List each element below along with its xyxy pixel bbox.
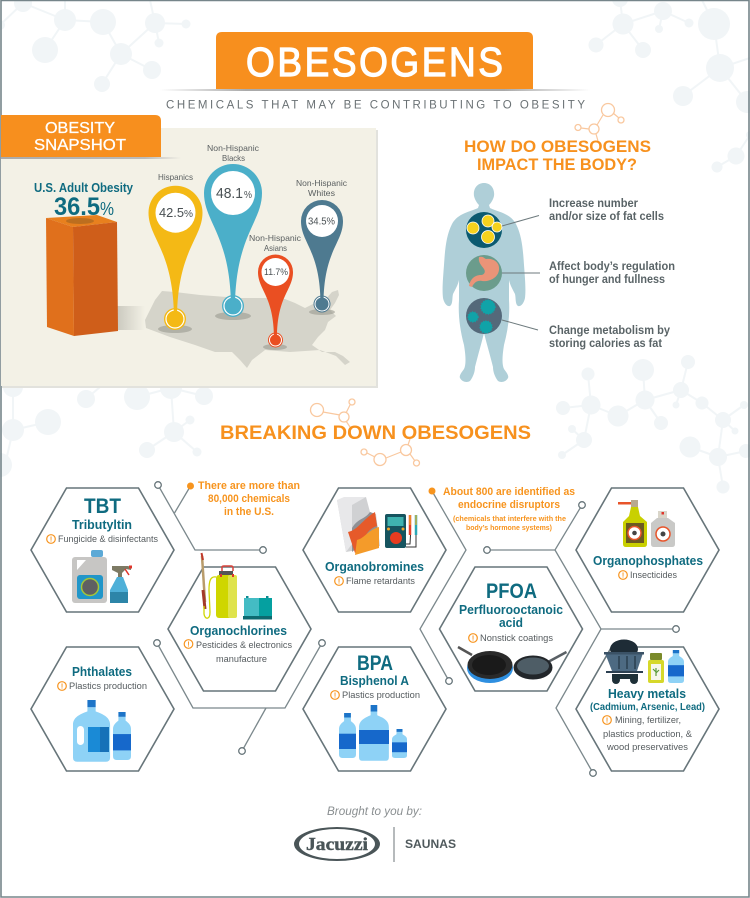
warning icon <box>619 571 627 580</box>
panel: Heavy metals: plastics production, & <box>603 729 693 740</box>
panel: BPA: BPA <box>357 652 393 675</box>
pin: Non-Hispanic Asians: Asians <box>264 243 287 253</box>
logo: Jacuzzi Saunas: Jacuzzi <box>306 834 368 854</box>
US adult obesity value <box>34 181 133 221</box>
background molecules: top left <box>0 0 190 92</box>
logo: Jacuzzi Saunas: SAUNAS <box>405 839 456 851</box>
callout: hunger: Affect body’s regulation <box>549 261 675 273</box>
background molecules: below snapshot <box>0 377 213 477</box>
warning icon: ! <box>334 692 336 700</box>
callout: fat cells: Increase number <box>549 198 638 210</box>
warning icon: ! <box>338 578 340 586</box>
tab: obesity snapshot heading: SNAPSHOT <box>34 137 126 154</box>
pin: Non-Hispanic Asians: 11.7% <box>264 267 289 278</box>
panel: Organobromines <box>303 488 446 612</box>
callout: 80,000 chemicals: There are more than <box>198 480 300 492</box>
pin: Non-Hispanic Whites <box>296 178 348 315</box>
callout: endocrine disruptors: endocrine disruptors <box>458 499 560 511</box>
panel: PFOA: Perfluorooctanoic <box>459 602 563 617</box>
panel: TBT: Tributyltin <box>72 517 132 532</box>
warning icon: ! <box>61 684 63 690</box>
fat cells circle <box>466 212 502 248</box>
warning icon: ! <box>622 572 624 580</box>
callout: metabolism: Change metabolism by <box>549 325 671 337</box>
icon: insecticide bottles <box>618 500 675 547</box>
pin: Non-Hispanic Whites: Non-Hispanic <box>296 178 348 188</box>
callout: metabolism: storing calories as fat <box>549 338 662 350</box>
callout: endocrine disruptors: body’s hormone systems) <box>466 523 552 532</box>
callout: 80,000 chemicals: in the U.S. <box>224 506 274 518</box>
pin: Non-Hispanic Asians: Non-Hispanic <box>249 233 302 243</box>
panel: PFOA <box>440 567 582 691</box>
callout: endocrine disruptors <box>428 486 575 532</box>
panel: TBT <box>31 488 174 612</box>
title: OBESOGENS <box>246 40 503 85</box>
warning icon: ! <box>187 642 190 648</box>
panel: Phthalates: Phthalates <box>72 664 132 679</box>
callout: fat cells <box>502 198 664 226</box>
pin: Non-Hispanic Asians <box>249 233 302 350</box>
US adult obesity value: U.S. Adult Obesity <box>34 181 133 195</box>
US adult obesity value: % <box>100 199 114 219</box>
background molecules: lower right <box>556 355 750 494</box>
pin: Non-Hispanic Blacks: % <box>244 190 252 201</box>
pin: Non-Hispanic Blacks <box>204 143 262 320</box>
panel: Heavy metals: wood preservatives <box>606 742 688 753</box>
icon: coal cart, jar and bottle <box>604 640 684 684</box>
icon: orange molecule below breaking heading <box>361 439 420 466</box>
warning icon <box>47 535 55 544</box>
icon: orange molecule near impact heading <box>575 104 624 141</box>
panel: Organochlorines: manufacture <box>216 654 267 665</box>
panel: Organochlorines: Organochlorines <box>190 623 287 638</box>
panel: obesity snapshot <box>1 115 378 388</box>
panel: Heavy metals: Mining, fertilizer, <box>615 715 681 726</box>
panel: TBT: Fungicide & disinfectants <box>58 534 158 545</box>
panel: Heavy metals: (Cadmium, Arsenic, Lead) <box>590 702 705 713</box>
background molecules: top right <box>588 0 750 172</box>
icon: plastic bottles <box>339 705 407 761</box>
warning icon <box>58 682 66 690</box>
panel: Organophosphates: Insecticides <box>630 570 677 581</box>
3D bar <box>46 215 145 336</box>
tab: obesity snapshot heading: OBESITY <box>45 120 115 137</box>
pin: Non-Hispanic Blacks: Non-Hispanic <box>207 143 260 153</box>
callout: hunger <box>502 261 675 286</box>
icon: frying pans <box>458 647 566 683</box>
stomach circle <box>466 255 502 291</box>
logo: Jacuzzi Saunas <box>294 827 456 862</box>
panel: Organochlorines: Pesticides & electronics <box>196 640 292 651</box>
warning icon <box>184 640 193 648</box>
warning icon: ! <box>472 636 474 642</box>
callout: hunger: of hunger and fullness <box>549 274 665 286</box>
panel: Organochlorines <box>168 553 311 691</box>
pin: Hispanics: Hispanics <box>158 172 193 182</box>
warning icon: ! <box>606 718 608 724</box>
callout: endocrine disruptors: (chemicals that interfere with the <box>453 514 566 523</box>
icon: sprayer and battery <box>202 553 272 620</box>
pin: Non-Hispanic Whites: 34.5% <box>308 216 335 228</box>
warning icon <box>335 577 343 586</box>
metabolism circle <box>466 298 502 334</box>
panel: TBT: TBT <box>84 495 121 518</box>
panel: BPA: Plastics production <box>342 690 420 701</box>
subtitle: CHEMICALS THAT MAY BE CONTRIBUTING TO OBESITY <box>166 100 585 112</box>
footer: brought to you by: Brought to you by: <box>327 804 422 818</box>
pin: Non-Hispanic Whites: Whites <box>308 188 335 198</box>
heading: breaking down obesogens: BREAKING DOWN OBESOGENS <box>220 423 531 444</box>
panel: PFOA: PFOA <box>486 580 537 603</box>
panel: Organobromines: Organobromines <box>325 559 424 574</box>
icon: insulation and multimeter <box>337 497 416 555</box>
pin: Hispanics: % <box>184 209 193 220</box>
warning icon <box>469 634 477 642</box>
panel: BPA: Bisphenol A <box>340 673 410 688</box>
panel: BPA <box>303 647 446 771</box>
panel: Heavy metals: Heavy metals <box>608 686 686 701</box>
icon: plastic bottles <box>73 700 131 762</box>
icon: jug and spray bottle <box>72 550 132 603</box>
panel: Phthalates: Plastics production <box>69 681 147 692</box>
heading: how do obesogens impact the body <box>464 137 651 174</box>
warning icon <box>603 716 611 724</box>
pin: Hispanics: 42.5 <box>159 205 184 220</box>
callout: endocrine disruptors: About 800 are identified as <box>443 486 575 498</box>
US adult obesity value: 36.5 <box>54 193 100 221</box>
US map <box>145 290 350 368</box>
pin: Non-Hispanic Blacks: Blacks <box>222 153 245 163</box>
tab: obesity snapshot heading <box>1 115 181 159</box>
callout: 80,000 chemicals: 80,000 chemicals <box>208 493 290 505</box>
title banner <box>160 32 590 91</box>
panel: Organobromines: Flame retardants <box>346 576 415 587</box>
panel: PFOA: Nonstick coatings <box>480 633 553 644</box>
callout: metabolism <box>502 320 671 350</box>
heading: how do obesogens impact the body: IMPACT THE BODY? <box>477 155 637 174</box>
warning icon: ! <box>50 536 52 544</box>
callout: fat cells: and/or size of fat cells <box>549 211 664 223</box>
silhouette <box>443 183 525 382</box>
connector lines <box>154 482 679 776</box>
pin: Non-Hispanic Blacks: 48.1 <box>216 185 243 202</box>
body figure <box>443 183 525 382</box>
pin: Hispanics <box>148 172 202 333</box>
heading: how do obesogens impact the body: HOW DO OBESOGENS <box>464 137 651 156</box>
panel: Phthalates <box>31 647 174 771</box>
warning icon <box>331 691 339 700</box>
panel: Heavy metals <box>576 640 719 771</box>
panel: Organophosphates: Organophosphates <box>593 553 703 568</box>
panel: Organophosphates <box>576 488 719 612</box>
panel: PFOA: acid <box>499 615 523 630</box>
callout: 80,000 chemicals <box>187 480 300 518</box>
icon: orange molecule above breaking heading <box>310 399 355 427</box>
